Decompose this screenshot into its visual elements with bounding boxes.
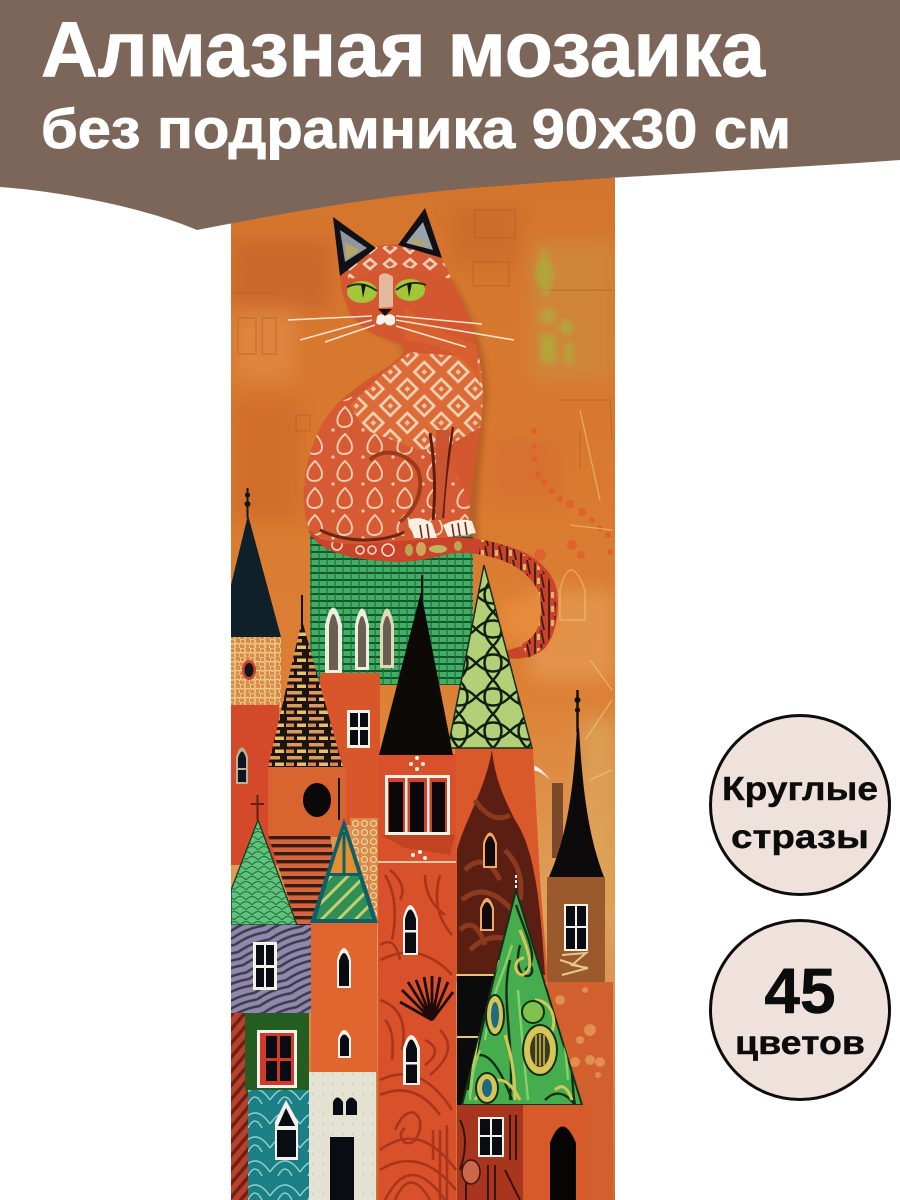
cat face [347, 273, 426, 326]
badge: round rhinestones [710, 716, 890, 894]
badge: 45 colours: 45 [764, 955, 836, 1027]
left roofs and towers [231, 778, 378, 1200]
small window [478, 1117, 504, 1157]
window tower lower [403, 1035, 420, 1085]
bottom right blocks with door [457, 1105, 586, 1200]
badge: 45 colours [710, 920, 890, 1100]
badge: round rhinestones: стразы [731, 818, 869, 855]
lattice green spire [448, 565, 532, 748]
swirl tower carvings [380, 870, 456, 1200]
right black spire with brown tower [534, 690, 613, 1200]
green swirl spire [462, 875, 582, 1105]
teal wall window [275, 1100, 298, 1160]
cat shadow [308, 280, 487, 548]
cat paws [404, 518, 476, 538]
left black spire with honeycomb roof [231, 488, 281, 865]
brown gothic tower [455, 748, 548, 1105]
cat tail [308, 530, 558, 659]
green building under the cat [310, 535, 473, 685]
header ribbon [0, 0, 900, 230]
tower windows [337, 948, 351, 1058]
window red wall [347, 710, 370, 748]
cat whiskers [288, 316, 514, 347]
tail ornament [319, 538, 462, 557]
shell fan [400, 976, 453, 1020]
cat body [304, 244, 483, 544]
tail pattern [480, 547, 548, 651]
green wall window [257, 1030, 297, 1088]
cat [288, 205, 558, 659]
central black spire and tower [268, 575, 456, 1200]
title line two: без подрамника 90х30 см [41, 97, 791, 160]
badge: 45 colours: цветов [735, 1024, 865, 1061]
chimney and smoke [534, 766, 563, 858]
painted orange background [231, 178, 615, 1200]
picture: cat on rooftops diamond painting [231, 178, 615, 1200]
title [41, 5, 791, 160]
window [564, 904, 588, 951]
cat ears [333, 208, 442, 276]
badge: round rhinestones: Круглые [722, 770, 878, 807]
window tower [403, 905, 418, 955]
purple wall window [253, 942, 277, 990]
striped spire [268, 595, 343, 767]
red window [385, 775, 450, 835]
title line one: Алмазная мозаика [41, 5, 766, 93]
